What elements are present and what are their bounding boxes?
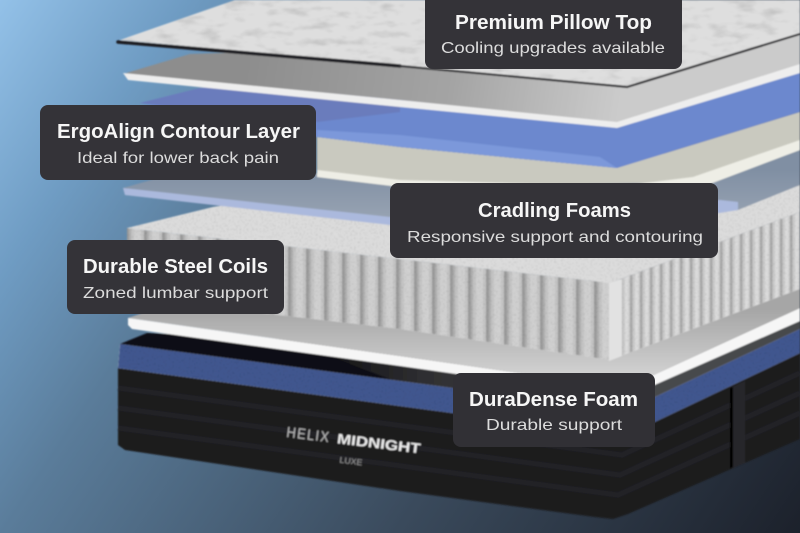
layer: cream foam [317,112,800,187]
label: ErgoAlign Contour Layer: Ideal for lower back pain [77,150,279,167]
label: Cradling Foams: Responsive support and contouring [407,229,703,246]
brand logo on mattress: LUXE [339,455,363,468]
label: DuraDense Foam: Durable support [486,417,623,434]
label: Cradling Foams [390,183,718,258]
label: DuraDense Foam: DuraDense Foam [469,389,638,411]
layer: pillow top [118,0,800,87]
brand logo on mattress [283,424,422,474]
layer: thin blue-gray foam [123,140,800,225]
brand logo on mattress: HELIX [286,424,331,446]
label: Durable Steel Coils: Zoned lumbar support [83,285,269,302]
label: Durable Steel Coils [67,240,284,314]
layer: gray comfort foam [123,30,800,128]
label: Premium Pillow Top [425,0,682,69]
label: Premium Pillow Top: Premium Pillow Top [455,12,652,34]
label: DuraDense Foam [453,373,655,447]
label: ErgoAlign Contour Layer: ErgoAlign Contour Layer [57,121,300,143]
label: ErgoAlign Contour Layer [40,105,316,180]
label: Premium Pillow Top: Cooling upgrades available [441,40,665,57]
layer: blue contour foam [140,50,800,168]
brand logo on mattress: MIDNIGHT [336,430,422,456]
label: Durable Steel Coils: Durable Steel Coils [83,256,268,278]
layer: base foam with cover [118,300,800,519]
label: Cradling Foams: Cradling Foams [478,200,631,222]
layer: steel coils [127,175,800,361]
layer: white transition board [128,280,800,398]
